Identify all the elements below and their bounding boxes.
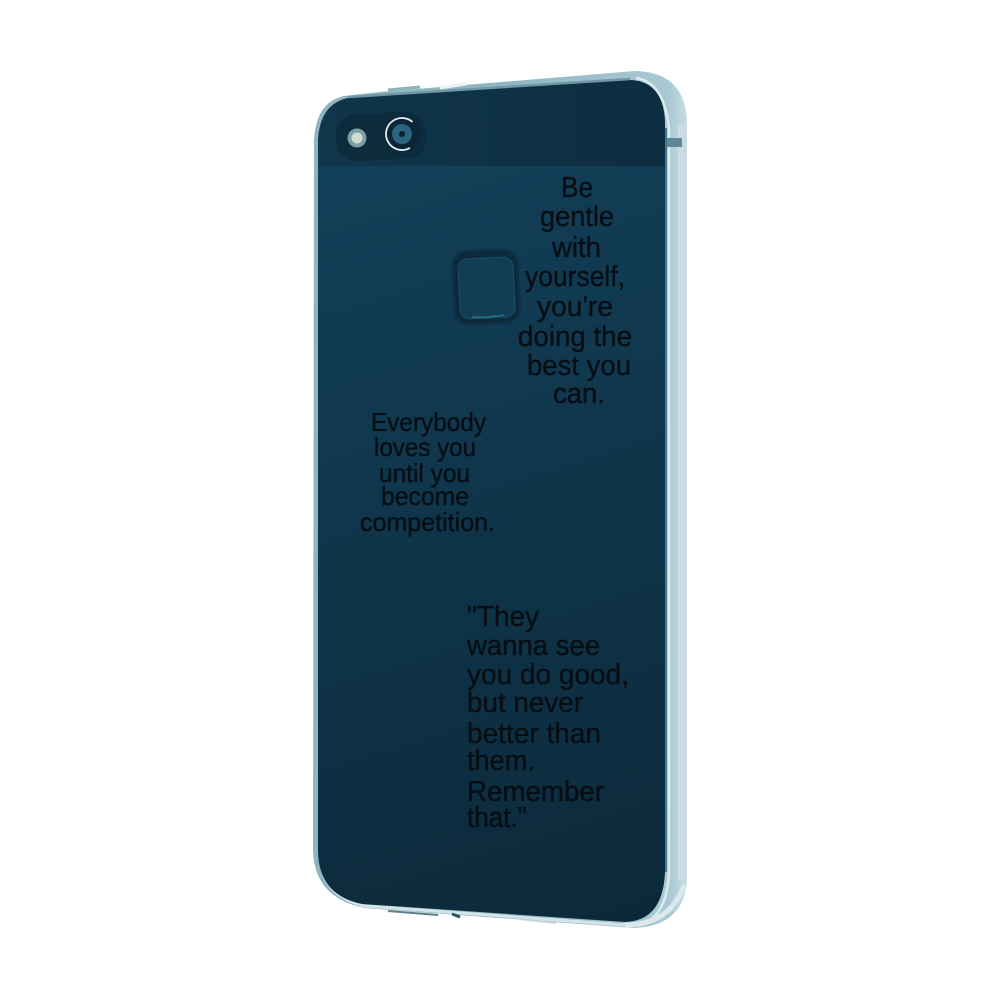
quote: they wanna see you do good: "They <box>467 601 539 633</box>
icon: lens <box>380 112 424 156</box>
quote: be gentle: you're <box>537 291 613 323</box>
quote: be gentle: can. <box>553 378 605 410</box>
quote: be gentle <box>518 172 632 410</box>
quote: everybody loves you: competition. <box>360 507 495 537</box>
quote: be gentle: gentle <box>540 201 614 233</box>
quote: everybody loves you: Everybody <box>371 407 486 437</box>
quote: be gentle: best you <box>527 350 631 382</box>
quote: they wanna see you do good: you do good, <box>467 659 629 691</box>
quote: be gentle: yourself, <box>525 261 625 293</box>
quote: everybody loves you <box>360 407 495 537</box>
quote: they wanna see you do good: wanna see <box>466 630 600 662</box>
quote: everybody loves you: become <box>381 481 469 511</box>
quote: they wanna see you do good: that." <box>467 802 527 834</box>
camera module <box>335 111 427 162</box>
quote: be gentle: doing the <box>518 321 632 353</box>
quote: they wanna see you do good: Remember <box>467 776 604 808</box>
fingerprint sensor <box>451 248 521 326</box>
quote: they wanna see you do good <box>466 601 629 834</box>
quote: they wanna see you do good: better than <box>467 718 601 750</box>
transparent case outer shell <box>313 71 687 928</box>
quote: be gentle: Be <box>561 172 593 204</box>
quote: everybody loves you: loves you <box>374 432 476 462</box>
quote: they wanna see you do good: them. <box>467 745 535 777</box>
quote: be gentle: with <box>551 232 601 264</box>
quote: everybody loves you: until you <box>379 458 470 488</box>
small side and bottom details <box>388 84 556 923</box>
quote: they wanna see you do good: but never <box>467 687 583 719</box>
icon: flash <box>348 128 366 148</box>
phone back panel <box>310 70 670 922</box>
phone case illustration <box>313 71 687 928</box>
